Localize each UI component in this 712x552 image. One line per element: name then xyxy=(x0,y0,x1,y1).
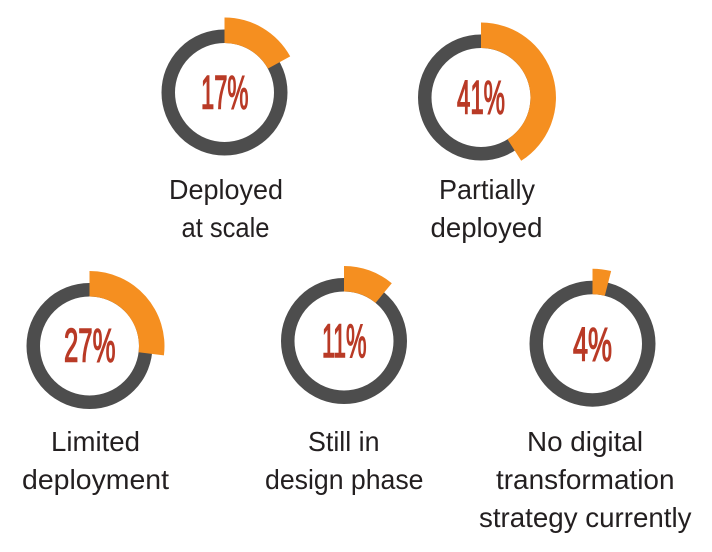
label: no digital transformation strategy currently: transformation xyxy=(496,464,674,495)
panel: no digital transformation strategy currently xyxy=(479,269,692,533)
label: still in design phase xyxy=(265,426,424,495)
value: 41%: 41% xyxy=(457,72,505,124)
label: limited deployment xyxy=(22,426,169,495)
donut ring: 4% xyxy=(536,287,649,400)
donut segment: 4% xyxy=(592,269,611,296)
label: deployed at scale: Deployed xyxy=(169,174,283,205)
donut ring: 11% xyxy=(288,285,400,397)
label: still in design phase: Still in xyxy=(308,426,380,457)
label: deployed at scale xyxy=(169,174,283,243)
donut ring: 27% xyxy=(33,290,146,402)
label: partially deployed: deployed xyxy=(430,212,542,243)
label: limited deployment: Limited xyxy=(51,426,140,457)
panel: deployed at scale xyxy=(168,18,290,243)
label: no digital transformation strategy currently: No digital xyxy=(527,426,643,457)
panel: limited deployment xyxy=(22,271,169,495)
value: 27%: 27% xyxy=(64,320,116,372)
panel: still in design phase xyxy=(265,266,424,495)
donut ring: 41% xyxy=(425,41,537,154)
donut segment: 11% xyxy=(344,266,392,303)
donut segment: 27% xyxy=(90,271,164,355)
label: no digital transformation strategy currently xyxy=(479,426,692,533)
value: 4%: 4% xyxy=(573,318,612,372)
donut ring: 17% xyxy=(168,36,281,149)
label: partially deployed: Partially xyxy=(439,174,535,205)
panel: partially deployed xyxy=(425,22,556,243)
panel: still in design phase: 11% xyxy=(322,315,366,368)
label: deployed at scale: at scale xyxy=(182,212,270,243)
panel: deployed at scale: 17% xyxy=(201,66,248,120)
label: limited deployment: deployment xyxy=(22,464,169,495)
label: still in design phase: design phase xyxy=(265,464,424,495)
donut segment: 41% xyxy=(481,22,556,161)
label: partially deployed xyxy=(430,174,542,243)
label: no digital transformation strategy currently: strategy currently xyxy=(479,502,692,533)
donut segment: 17% xyxy=(224,18,290,69)
